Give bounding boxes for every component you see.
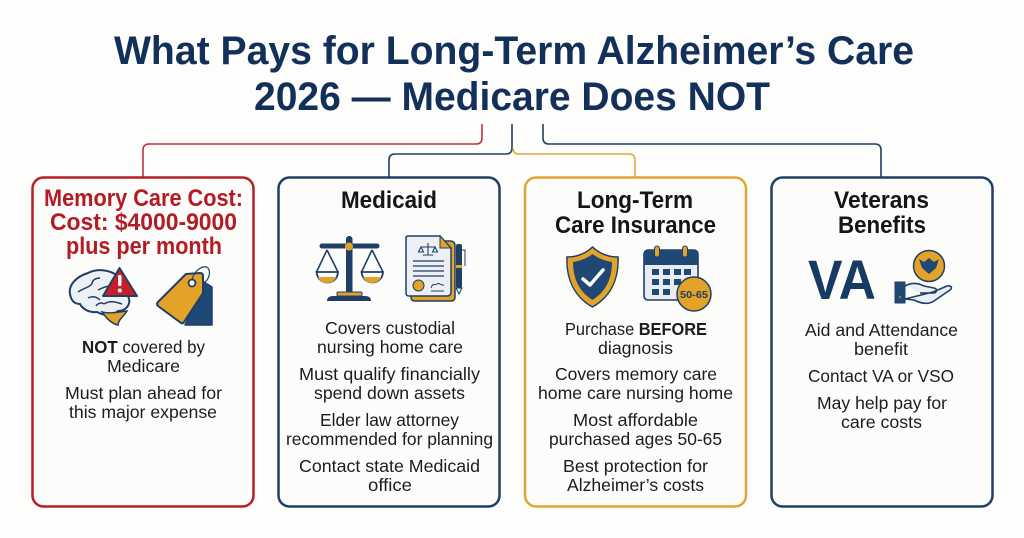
icon: VA logo: VA (808, 248, 876, 311)
heading: veterans benefits: Benefits (838, 212, 926, 239)
panel: veterans benefits (772, 178, 992, 506)
text: aid and attendance (805, 320, 958, 359)
text: best protection: Alzheimer’s costs (567, 475, 704, 495)
text: purchase before diagnosis: Purchase BEFORE (565, 319, 707, 339)
text: covers memory care: home care nursing home (538, 383, 733, 403)
heading: long-term care insurance (555, 187, 716, 239)
connector: navy to medicaid (389, 124, 512, 177)
title: What Pays for Long-Term Alzheimer’s Care (114, 29, 914, 73)
icon: shield with check (567, 247, 618, 307)
text: medicare: Medicare (107, 356, 180, 376)
heading: medicaid: Medicaid (341, 187, 437, 214)
text: most affordable: Most affordable (573, 410, 698, 430)
text: purchase before diagnosis (565, 319, 707, 358)
text: aid and attendance: Aid and Attendance (805, 320, 958, 340)
text: covers custodial care: nursing home care (317, 337, 463, 357)
panel: long-term care insurance (525, 178, 746, 506)
text: best protection (563, 456, 708, 495)
icon: brain with warning (70, 268, 137, 325)
heading: long-term care insurance: Long-Term (577, 187, 693, 214)
icon: scales of justice (316, 236, 383, 301)
icon: legal document and pen (406, 236, 465, 301)
text: covers memory care: Covers memory care (555, 364, 717, 384)
text: must qualify financially: Must qualify financially (299, 364, 480, 384)
text: covers custodial care: Covers custodial (325, 318, 455, 338)
title (114, 29, 914, 119)
text: most affordable (549, 410, 722, 449)
text: purchase before diagnosis: diagnosis (598, 338, 673, 358)
text: aid and attendance: benefit (854, 339, 908, 359)
heading: veterans benefits (834, 187, 929, 239)
icon: price tag (157, 267, 212, 325)
heading: memory care cost (44, 185, 243, 260)
connector: navy to veterans benefits (543, 124, 881, 177)
text: covers custodial care (317, 318, 463, 357)
text: contact state medicaid (299, 456, 480, 495)
icon: calendar with age badge: 50-65 (680, 289, 708, 301)
heading: memory care cost: Memory Care Cost: (44, 185, 243, 212)
connector: red to memory care (143, 124, 482, 177)
text: elder law attorney: recommended for planning (286, 429, 493, 449)
heading: memory care cost: plus per month (66, 233, 222, 260)
text: covers memory care (538, 364, 733, 403)
text: must qualify financially (299, 364, 480, 403)
panel: medicaid (278, 178, 500, 506)
text: must plan ahead: Must plan ahead for (65, 383, 222, 403)
text: contact state medicaid: office (368, 475, 412, 495)
text: best protection: Best protection for (563, 456, 708, 476)
text: must plan ahead (65, 383, 222, 422)
panel: memory care cost (32, 178, 254, 506)
icon: hand with coin (895, 250, 951, 303)
text: elder law attorney (286, 410, 493, 449)
heading: veterans benefits: Veterans (834, 187, 929, 214)
text: may help pay: May help pay for (817, 393, 947, 413)
text: may help pay (817, 393, 947, 432)
text: contact VA or VSO: Contact VA or VSO (808, 366, 954, 386)
connector: gold to long-term care insurance (513, 148, 635, 177)
text: elder law attorney: Elder law attorney (320, 410, 459, 430)
text: must plan ahead: this major expense (69, 402, 217, 422)
text: not covered by medicare: NOT covered by (82, 337, 205, 357)
text: may help pay: care costs (841, 412, 922, 432)
text: contact state medicaid: Contact state Medicaid (299, 456, 480, 476)
title: 2026 — Medicare Does NOT (254, 75, 770, 119)
heading: long-term care insurance: Care Insurance (555, 212, 716, 239)
icon: calendar with age badge (644, 246, 711, 311)
heading: memory care cost: Cost: $4000-9000 (50, 209, 237, 236)
text: most affordable: purchased ages 50-65 (549, 429, 722, 449)
text: must qualify financially: spend down assets (314, 383, 465, 403)
